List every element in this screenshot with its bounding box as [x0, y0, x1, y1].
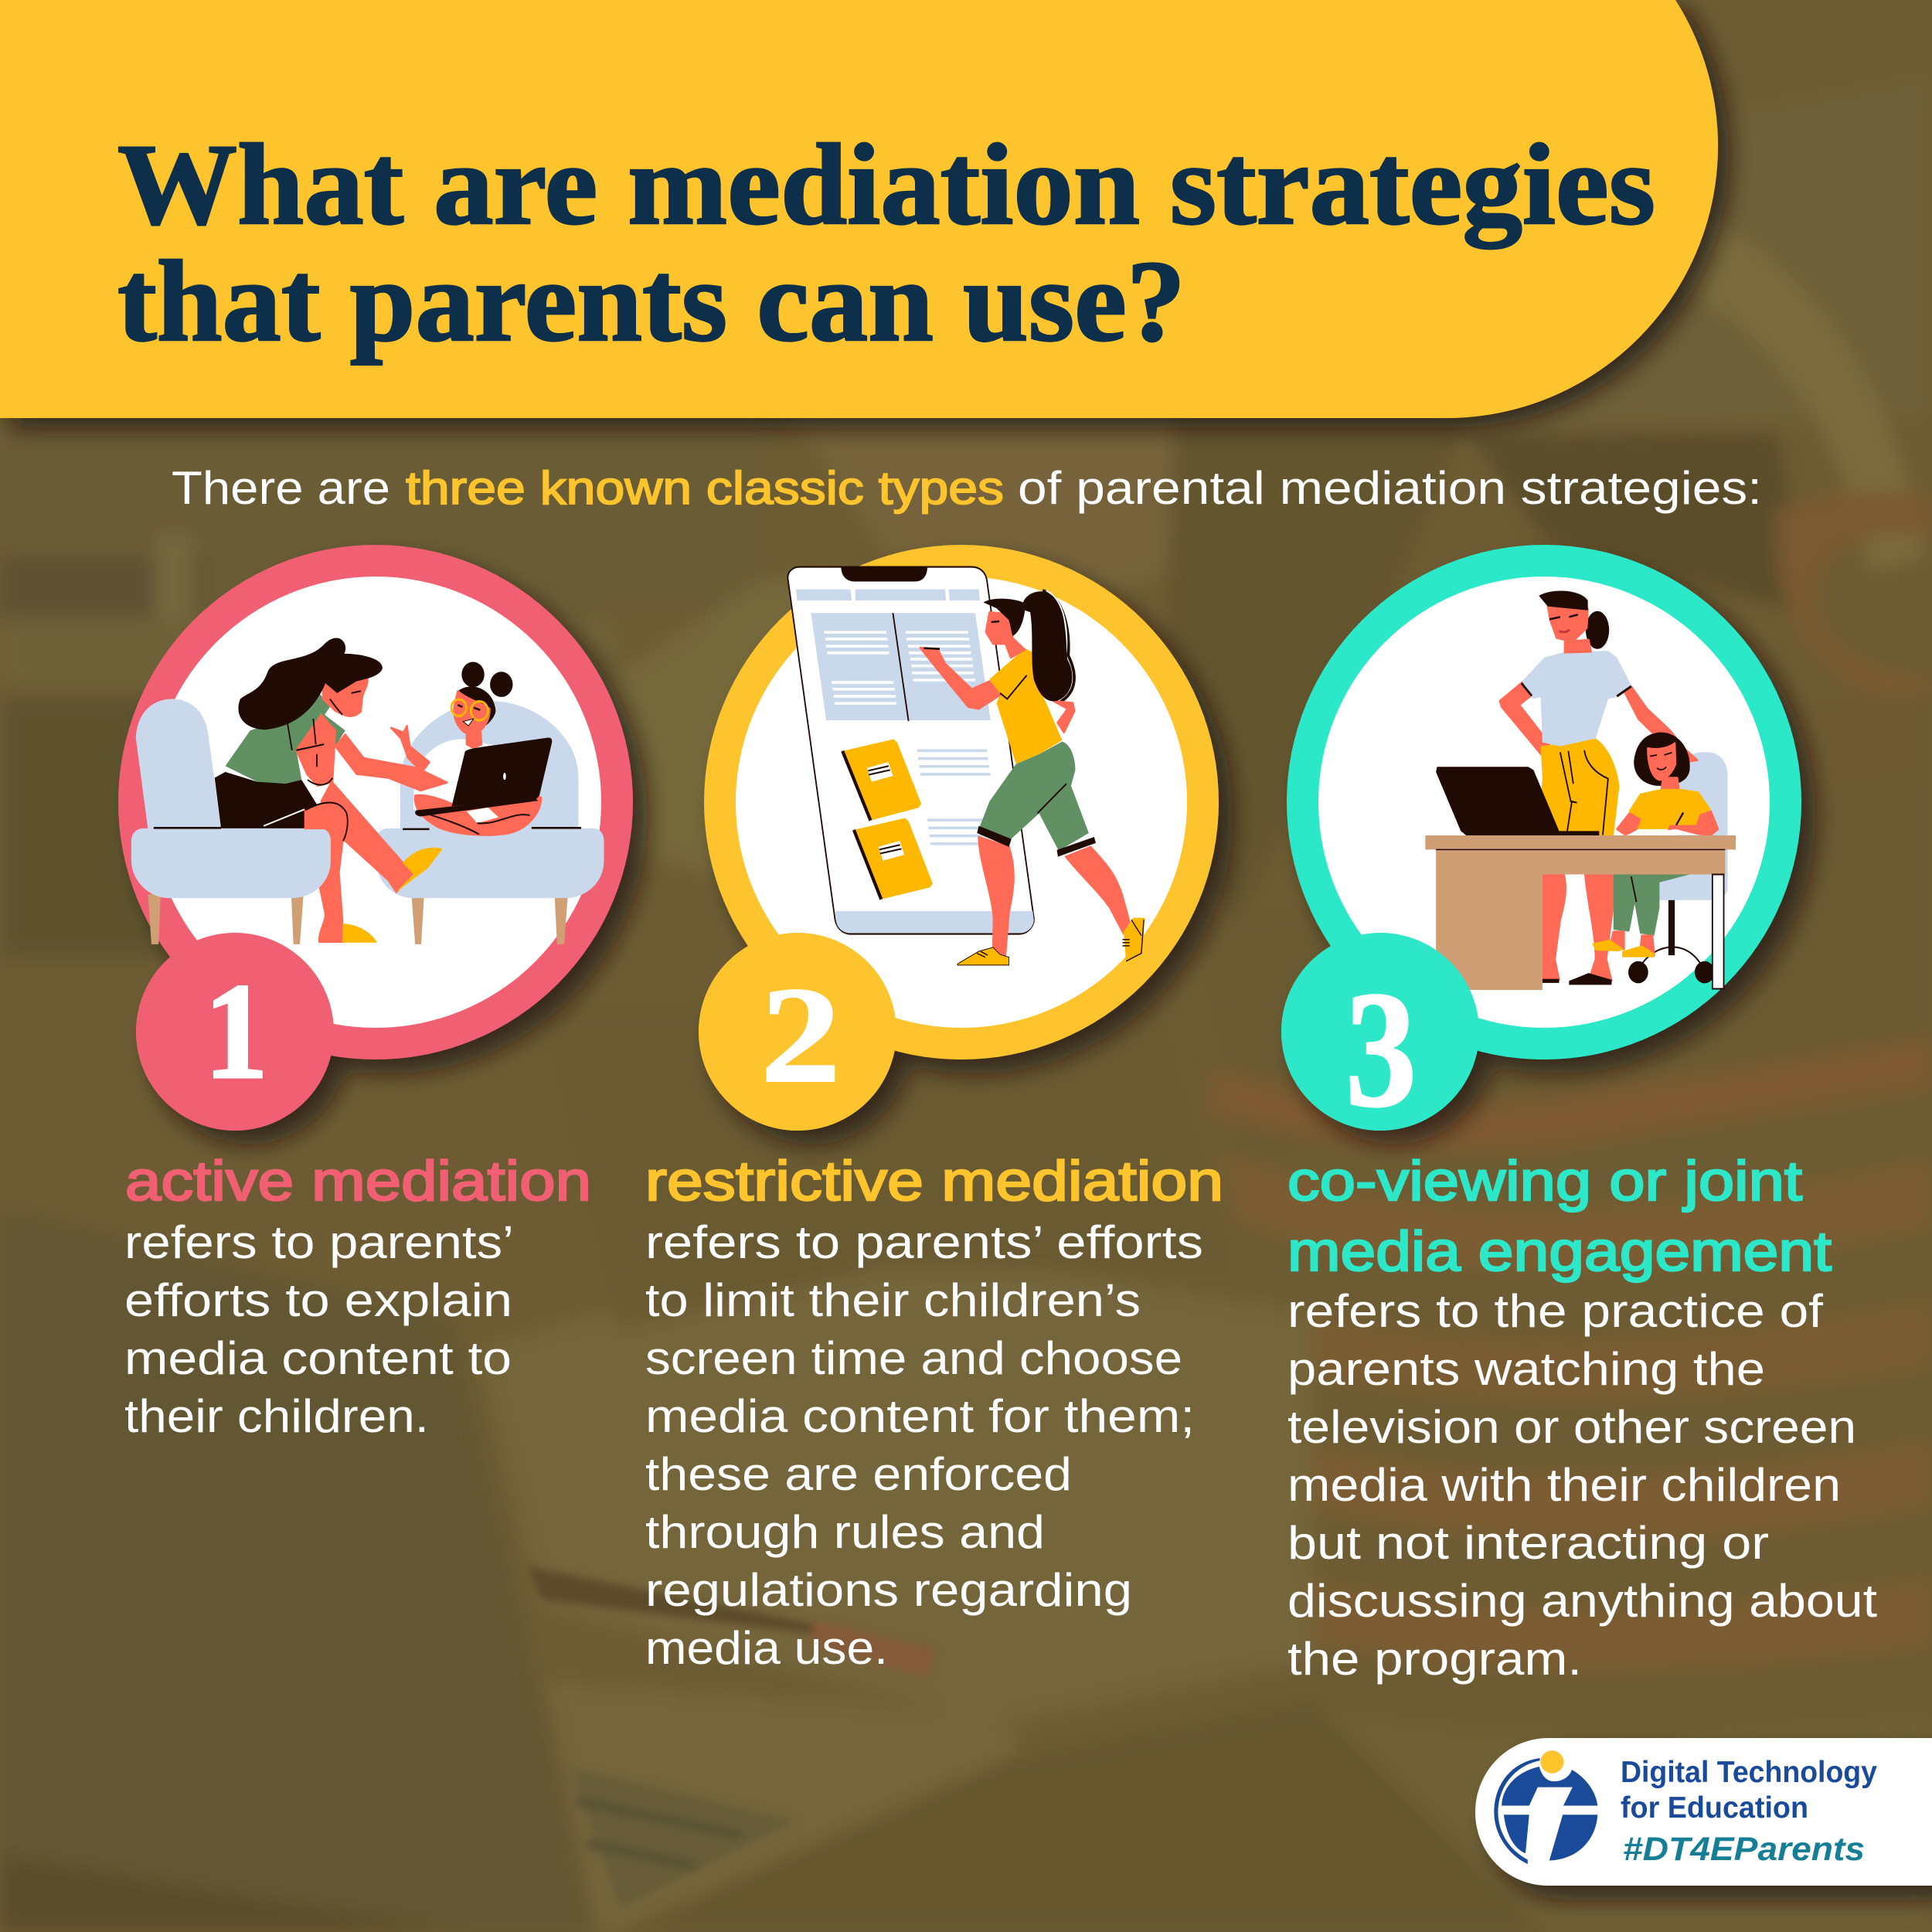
ring 3 — [1281, 545, 1801, 1131]
panel: restrictive mediation circle — [699, 545, 1219, 1131]
laptop base — [545, 1681, 1020, 1932]
text block: restrictive mediation: these are enforced — [645, 1448, 1072, 1500]
illustration: woman pointing at giant phone — [787, 567, 1145, 965]
text block: co-viewing or joint media engagement: media engagement — [1287, 1221, 1832, 1283]
text block: active mediation: their children. — [124, 1390, 429, 1442]
text block: active mediation: active mediation — [125, 1151, 591, 1213]
text block: co-viewing or joint media engagement — [1287, 1151, 1877, 1685]
text block: co-viewing or joint media engagement: discussing anything about — [1287, 1575, 1877, 1627]
text block: restrictive mediation: media use. — [645, 1622, 888, 1674]
ring 2 — [699, 545, 1219, 1131]
number badge 1 — [136, 933, 334, 1131]
title — [117, 121, 1655, 366]
illustration: mother and child at desk — [1425, 591, 1736, 990]
text block: co-viewing or joint media engagement: but not interacting or — [1287, 1517, 1769, 1569]
number badge 3: 3 — [1345, 957, 1417, 1141]
text block: co-viewing or joint media engagement: media with their children — [1287, 1459, 1841, 1511]
text block: restrictive mediation: screen time and choose — [645, 1332, 1182, 1384]
text block: restrictive mediation: refers to parents’ efforts — [645, 1216, 1203, 1268]
logo text — [1621, 1756, 1877, 1868]
text block: active mediation: media content to — [124, 1332, 512, 1384]
ring 1 — [118, 545, 633, 1131]
laptop screen — [0, 1206, 595, 1932]
text block: restrictive mediation: through rules and — [645, 1506, 1045, 1558]
text block: active mediation: efforts to explain — [124, 1274, 512, 1326]
text block: restrictive mediation — [645, 1151, 1223, 1674]
striped shirt — [1198, 773, 1932, 1159]
number badge 2 — [699, 933, 896, 1131]
illustration: mother and daughter on armchairs — [131, 638, 604, 944]
text block: co-viewing or joint media engagement: co-viewing or joint — [1287, 1151, 1802, 1213]
text block: restrictive mediation: regulations regarding — [645, 1564, 1132, 1616]
subtitle: of parental mediation strategies: — [1018, 462, 1762, 514]
text block: restrictive mediation: restrictive mediation — [645, 1151, 1223, 1213]
text block: restrictive mediation: media content for them; — [645, 1390, 1195, 1442]
text block: restrictive mediation: to limit their children’s — [645, 1274, 1141, 1326]
headphones and right side — [1468, 77, 1932, 433]
panel: active mediation circle — [118, 545, 633, 1131]
logo text: #DT4EParents — [1623, 1831, 1865, 1868]
woman — [215, 772, 318, 828]
panel: co-viewing circle — [1281, 545, 1801, 1141]
text block: active mediation — [124, 1151, 591, 1442]
logo icon — [1494, 1750, 1597, 1864]
subtitle: There are — [172, 462, 390, 514]
standing leg — [319, 828, 344, 942]
text block: co-viewing or joint media engagement: refers to the practice of — [1287, 1285, 1823, 1337]
number badge 2: 2 — [760, 958, 841, 1111]
paper and desk — [478, 1236, 1314, 1723]
title: What are mediation strategies — [117, 121, 1655, 249]
text block: active mediation: refers to parents’ — [124, 1216, 514, 1268]
text block: co-viewing or joint media engagement: television or other screen — [1287, 1401, 1856, 1453]
subtitle: three known classic types — [406, 462, 1004, 514]
number badge 3 — [1281, 933, 1479, 1141]
text block: co-viewing or joint media engagement: the program. — [1287, 1633, 1582, 1685]
header banner — [0, 0, 1718, 418]
subtitle — [172, 462, 1762, 514]
number badge 1: 1 — [204, 954, 268, 1107]
face and hair — [796, 417, 1206, 611]
upper wall — [0, 417, 773, 618]
logo text: Digital Technology — [1621, 1756, 1877, 1789]
logo text: for Education — [1621, 1791, 1808, 1825]
logo panel — [1475, 1738, 1932, 1886]
title: that parents can use? — [117, 237, 1185, 366]
text block: co-viewing or joint media engagement: parents watching the — [1287, 1343, 1765, 1395]
girl — [413, 739, 534, 809]
